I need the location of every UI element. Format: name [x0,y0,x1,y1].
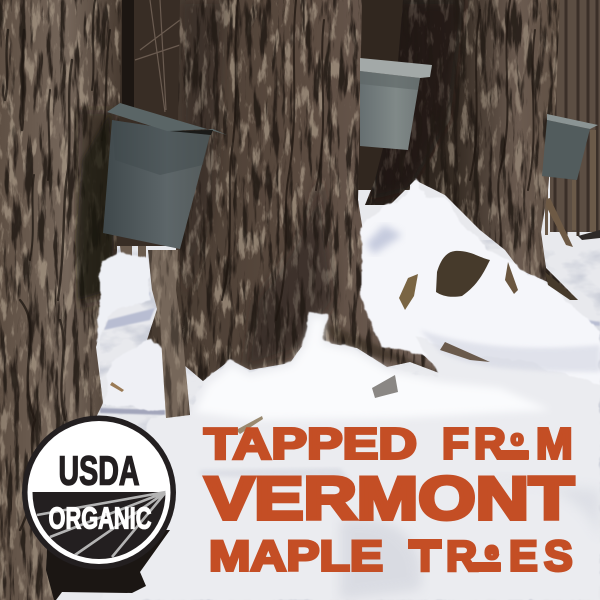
headline line 3: R [446,532,477,580]
ORGANIC wordmark: ORGANIC [48,500,152,536]
exposed earth patches and roots [110,251,578,434]
snow drifts [96,178,600,600]
bucket: large left [103,103,227,249]
headline line 1: M [536,420,573,468]
dark shadow beneath badge [46,530,170,600]
headline line 3: MAPLE [209,532,383,580]
badge: USDA Organic seal [22,416,176,570]
headline line 3 [209,532,573,580]
bucket shadow on left trunk [76,112,114,300]
headline line 1 [204,420,573,468]
headline: Tapped from Vermont maple trees [204,420,574,580]
bucket: middle [360,58,432,150]
headline line 3: E [509,532,538,580]
snow mound under right tree [362,178,600,400]
bright crest of the snow bank, fading into the field [195,318,550,420]
USDA wordmark: USDA [58,448,140,494]
headline line 1: R [474,420,506,468]
soft snow shading on lower field [200,225,600,600]
headline line 1: TAPPED [204,420,417,468]
headline line 1: F [442,420,469,468]
trunk: right maple [365,0,578,300]
headline line 3: T [412,532,438,580]
hand-placed deep bark furrows [5,0,535,530]
snow bank at center tree base [100,312,600,600]
trunk: center maple [147,0,447,381]
headline line 2: VERMONT [205,465,574,532]
headline line 3: e [485,538,498,565]
snow shadows [100,292,600,415]
bucket: right [542,114,598,180]
sapling trunk [148,250,190,418]
headline line 3: S [544,532,573,580]
trunk: left maple [0,0,122,600]
distant forest [115,0,600,270]
seal field rays [37,492,166,557]
headline line 1: o [511,428,523,450]
seal dark field [30,492,170,562]
